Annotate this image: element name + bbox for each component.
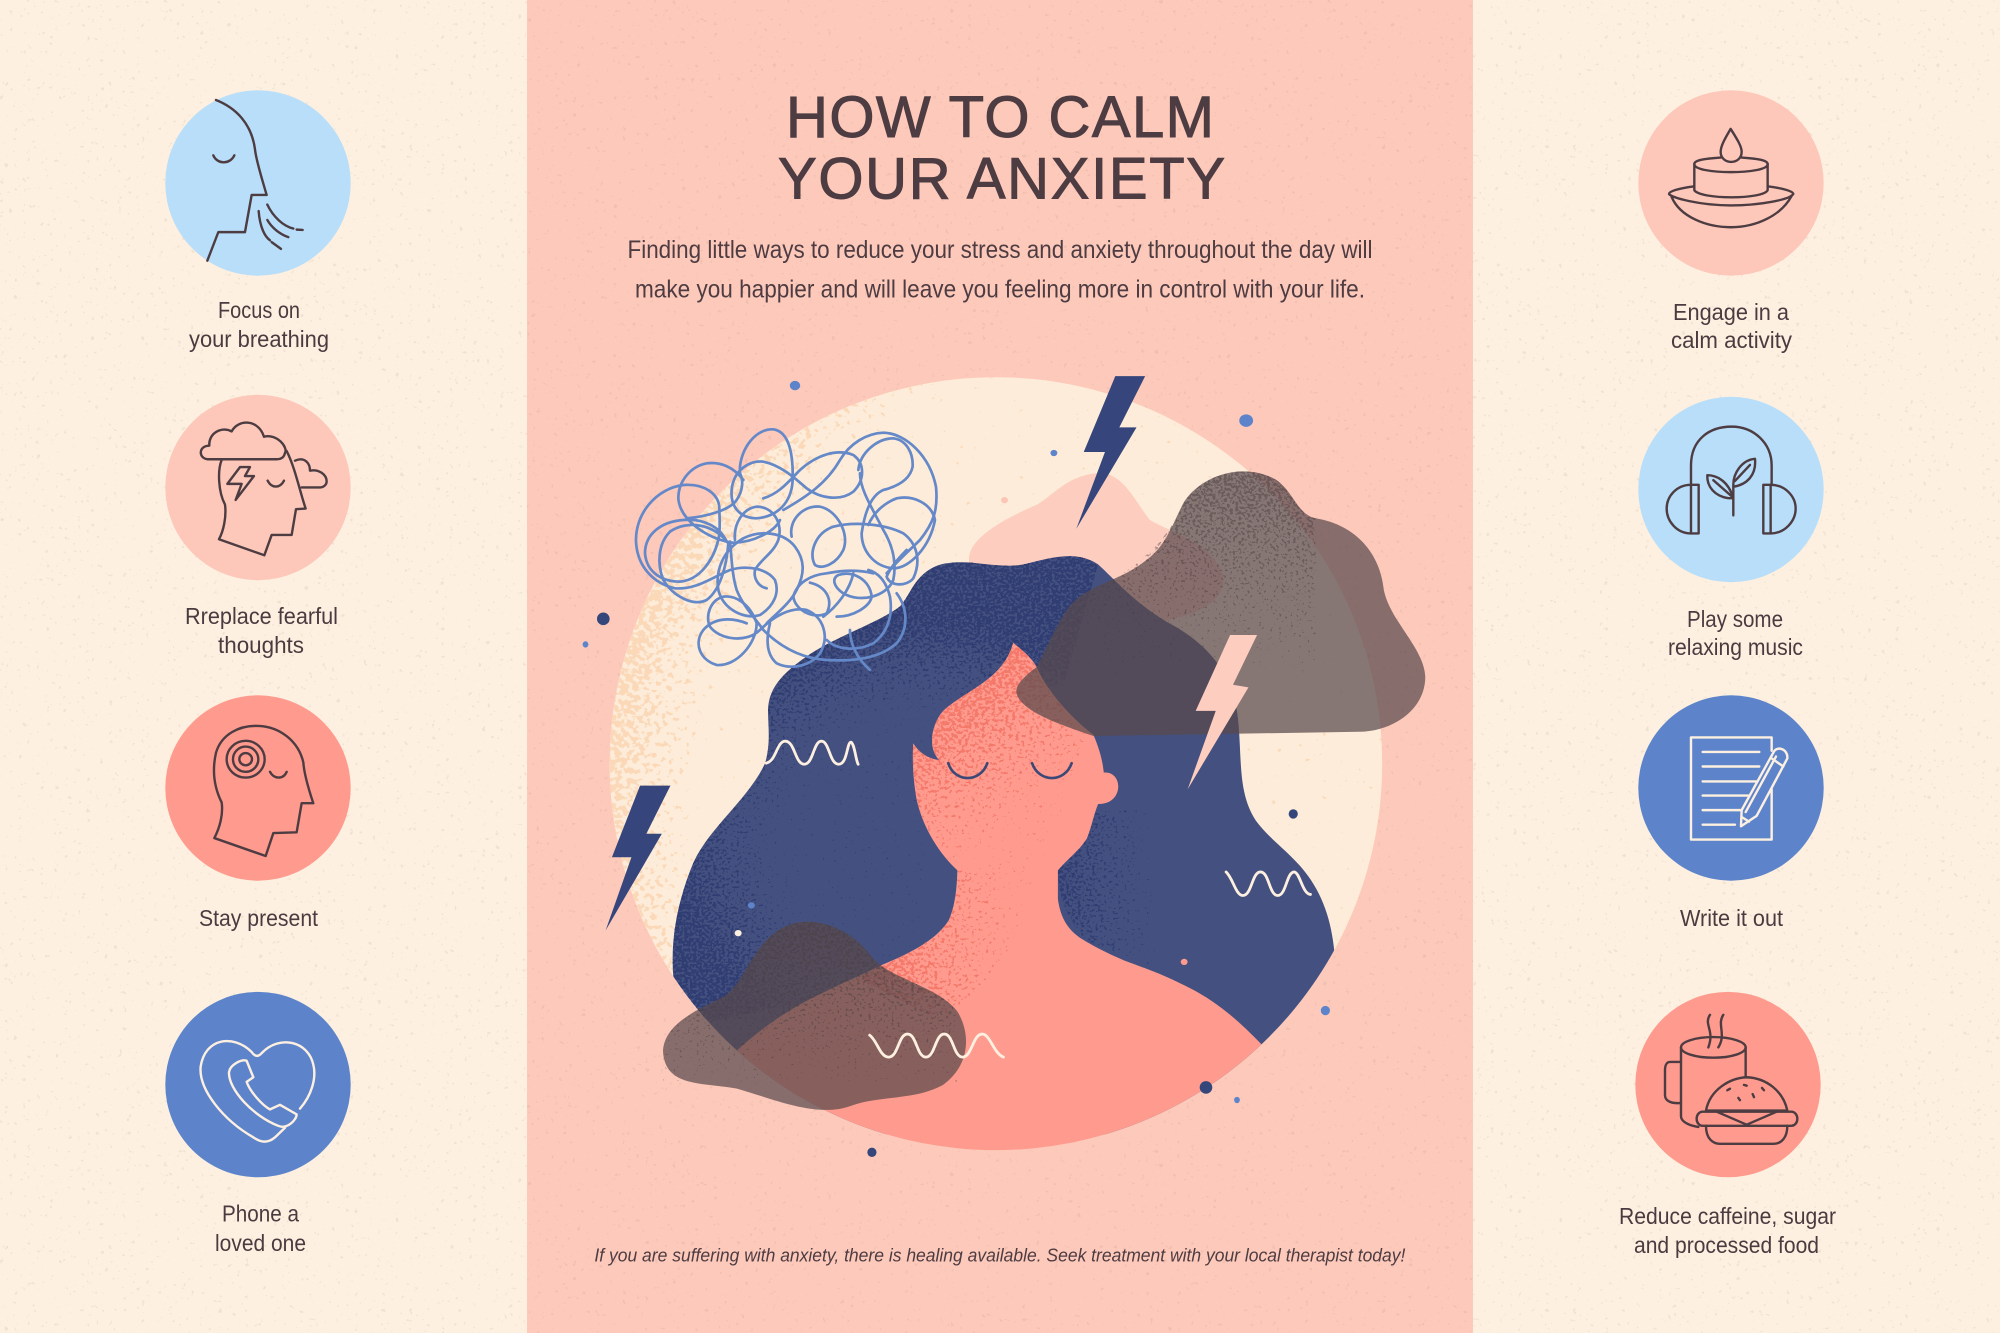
tip: play relaxing music: Play some (1687, 606, 1783, 632)
intro text: Finding little ways to reduce your stress and anxiety throughout the day will (628, 236, 1372, 264)
pink blob (969, 473, 1224, 632)
illustration: anxious woman (583, 376, 1425, 1187)
tip: play relaxing music: relaxing music (1668, 634, 1803, 660)
hair stipple right (1058, 810, 1155, 967)
tangled scribble (636, 429, 937, 670)
tip: write it out (1638, 695, 1824, 931)
circle (1635, 992, 1821, 1177)
tip: reduce caffeine, sugar and processed food (1619, 992, 1836, 1258)
tip: reduce caffeine, sugar and processed food: Reduce caffeine, sugar (1619, 1203, 1836, 1229)
neck stipple (857, 863, 1035, 1019)
closed eyes (948, 763, 1072, 778)
circle (165, 395, 351, 580)
icon: head with target (214, 726, 313, 856)
tip: stay present (165, 695, 351, 931)
circle (165, 695, 351, 881)
title (778, 85, 1225, 212)
icon: heart with phone (201, 1041, 314, 1142)
decorative dots (583, 381, 1330, 1157)
lightning bolts (606, 376, 1257, 931)
tip: write it out: Write it out (1680, 905, 1784, 931)
tip: replace fearful thoughts (165, 395, 351, 658)
title: HOW TO CALM (786, 85, 1214, 150)
circle (165, 992, 351, 1177)
tip: engage in a calm activity: Engage in a (1673, 299, 1789, 325)
bolt pink (1188, 635, 1257, 789)
tip: replace fearful thoughts: Rreplace fearful (185, 603, 338, 629)
anxiety waves (766, 741, 1310, 1057)
tip: phone a loved one (165, 992, 351, 1256)
panel: centre column (527, 0, 1473, 1333)
tip: stay present: Stay present (199, 905, 319, 931)
tip: engage in a calm activity (1638, 90, 1824, 353)
icon: candle (1669, 129, 1793, 227)
woman (672, 556, 1334, 1150)
tip: phone a loved one: Phone a (222, 1200, 299, 1226)
storm cloud top right (1016, 471, 1425, 736)
intro text: make you happier and will leave you feeling more in control with your life. (635, 276, 1365, 304)
storm cloud bottom left (663, 922, 966, 1110)
body (737, 870, 1262, 1150)
tip: focus on your breathing: your breathing (189, 326, 329, 352)
circle (1638, 695, 1824, 881)
face (913, 643, 1118, 870)
icon: face breathing (207, 100, 303, 261)
icon: coffee mug and burger (1665, 1015, 1797, 1144)
disc stipple (610, 377, 1382, 1150)
circle (165, 90, 351, 276)
bolt left (606, 786, 670, 931)
tip: replace fearful thoughts: thoughts (218, 632, 304, 658)
intro text (628, 236, 1372, 304)
tip: phone a loved one: loved one (215, 1230, 306, 1256)
bolt top (1076, 376, 1145, 529)
circle (1638, 397, 1824, 582)
title: YOUR ANXIETY (778, 146, 1225, 212)
cloud grain bottom (663, 922, 957, 1082)
tip: reduce caffeine, sugar and processed food: and processed food (1634, 1232, 1819, 1258)
hair (656, 556, 1336, 1134)
tip: focus on your breathing (165, 90, 351, 352)
icon: paper and pencil (1691, 737, 1787, 840)
tip: play relaxing music (1638, 397, 1824, 660)
icon: headphones with plant (1667, 427, 1796, 533)
hair stipple (673, 556, 1098, 1030)
circle (1638, 90, 1824, 276)
icon: head with clouds (201, 423, 327, 555)
footer note: If you are suffering with anxiety, there is healing available. Seek treatment with your local therapist today! (594, 1246, 1405, 1266)
cloud grain top (1046, 471, 1316, 674)
background disc (610, 377, 1382, 1150)
tip: engage in a calm activity: calm activity (1671, 327, 1792, 353)
face stipple (913, 643, 1087, 873)
tip: focus on your breathing: Focus on (218, 297, 300, 323)
